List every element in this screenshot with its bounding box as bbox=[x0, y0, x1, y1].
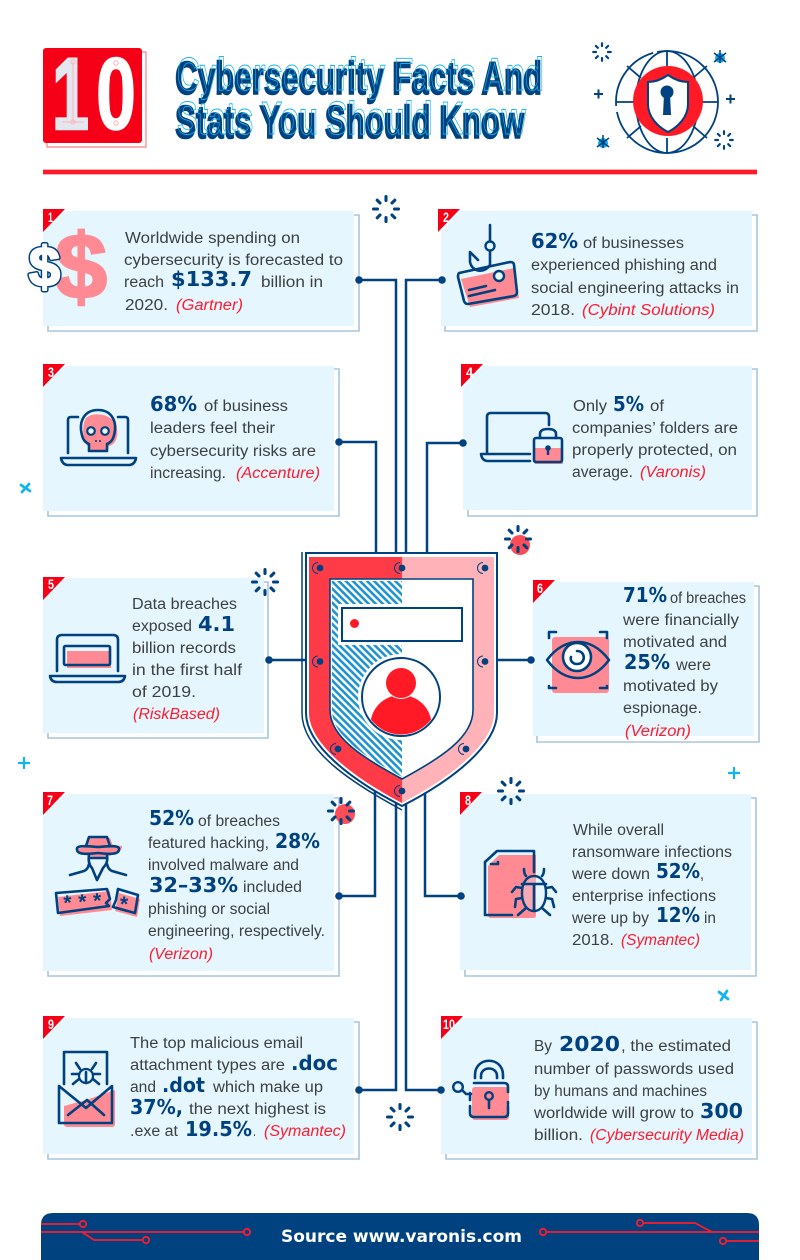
footer source bar bbox=[41, 1213, 759, 1260]
panel: fact 4: Only bbox=[573, 398, 607, 415]
panel: fact 10: (Cybersecurity Media) bbox=[590, 1127, 744, 1144]
icon: dollar signs: $ bbox=[55, 216, 107, 318]
panel: fact 7: 28% bbox=[275, 829, 320, 853]
panel: fact 7: phishing or social bbox=[148, 901, 270, 918]
panel: fact 1: 1 bbox=[48, 209, 53, 225]
icon: envelope with bug bbox=[59, 1052, 115, 1127]
panel: fact 4: of bbox=[650, 398, 665, 415]
panel: fact 1: cybersecurity is forecasted to bbox=[124, 252, 343, 269]
panel: fact 7: involved malware and bbox=[148, 857, 299, 874]
panel: fact 9: attachment types are bbox=[130, 1057, 285, 1074]
icon: hacker with broken password: * bbox=[120, 893, 129, 916]
panel: fact 4: 4 bbox=[466, 364, 473, 380]
header divider bbox=[43, 169, 757, 175]
panel: fact 10: billion. bbox=[534, 1127, 583, 1144]
panel: fact 4: (Varonis) bbox=[640, 464, 706, 481]
panel: fact 2 bbox=[438, 209, 757, 331]
footer source bar: Source www.varonis.com bbox=[281, 1227, 522, 1246]
title: Stats You Should Know bbox=[175, 96, 524, 148]
panel: fact 9: 37%, bbox=[130, 1095, 183, 1119]
panel: fact 10: number of passwords used bbox=[534, 1061, 734, 1078]
panel: fact 9: . bbox=[253, 1123, 256, 1140]
panel: fact 9 bbox=[43, 1016, 359, 1159]
panel: fact 9: which make up bbox=[212, 1079, 323, 1096]
panel: fact 6: motivated by bbox=[623, 678, 718, 695]
title: Cybersecurity Facts And bbox=[175, 52, 542, 104]
icon: laptop with padlock bbox=[481, 413, 563, 464]
circuit traces bbox=[41, 1220, 759, 1244]
panel: fact 7: of breaches bbox=[198, 813, 280, 830]
panel: fact 3: of business bbox=[204, 398, 288, 415]
panel: fact 5: (RiskBased) bbox=[133, 706, 220, 723]
panel: fact 10: by humans and machines bbox=[534, 1083, 707, 1100]
panel: fact 7: 52% bbox=[149, 806, 194, 830]
panel: fact 10 bbox=[441, 1016, 757, 1159]
panel: fact 5: 5 bbox=[48, 576, 54, 592]
panel: fact 1: reach bbox=[124, 274, 164, 291]
panel: fact 7: (Verizon) bbox=[149, 946, 213, 963]
icon: dollar signs bbox=[29, 216, 107, 318]
icon: hacker with broken password bbox=[56, 837, 140, 917]
panel: fact 10: 10 bbox=[443, 1016, 455, 1032]
title bbox=[175, 48, 544, 148]
panel: fact 3: (Accenture) bbox=[236, 465, 320, 482]
panel: fact 3: 68% bbox=[150, 392, 197, 416]
panel: fact 5: billion records bbox=[132, 640, 236, 657]
panel: fact 3 bbox=[43, 364, 339, 516]
panel: fact 7: 7 bbox=[47, 792, 53, 808]
icon: skull on laptop bbox=[61, 410, 136, 465]
header number badge: 0 bbox=[96, 37, 136, 151]
panel: fact 10: 2020 bbox=[559, 1032, 620, 1056]
panel: fact 6: motivated and bbox=[623, 634, 727, 651]
panel: fact 6: were financially bbox=[622, 612, 739, 629]
panel: fact 1: 2020. bbox=[125, 297, 168, 314]
panel: fact 2: social engineering attacks in bbox=[531, 280, 739, 297]
panel: fact 6: espionage. bbox=[623, 700, 702, 717]
panel: fact 4: properly protected, on bbox=[572, 442, 737, 459]
panel: fact 8: ransomware infections bbox=[572, 844, 732, 861]
panel: fact 7: engineering, respectively. bbox=[148, 923, 325, 940]
panel: fact 5 bbox=[43, 576, 268, 738]
panel: fact 2: of businesses bbox=[583, 235, 684, 252]
rivets bbox=[312, 562, 488, 796]
icon: dollar signs: $ bbox=[29, 235, 60, 298]
icon: globe with shield bbox=[616, 51, 718, 153]
panel: fact 6: 71% bbox=[623, 583, 667, 607]
panel: fact 2: 62% bbox=[531, 229, 578, 253]
name box bbox=[338, 604, 466, 645]
icon: phishing hook and card bbox=[458, 225, 519, 307]
title: Stats You Should Know bbox=[177, 92, 526, 144]
panel: fact 4: average. bbox=[572, 464, 633, 481]
header number badge: 1 bbox=[52, 37, 89, 151]
panel: fact 3: 3 bbox=[48, 364, 54, 380]
panel: fact 9: .doc bbox=[291, 1051, 338, 1075]
panel: fact 1: (Gartner) bbox=[176, 297, 243, 314]
panel: fact 5: Data breaches bbox=[132, 596, 237, 613]
panel: fact 2: experienced phishing and bbox=[531, 257, 717, 274]
panel: fact 9: The top malicious email bbox=[130, 1035, 303, 1052]
panel: fact 1: $133.7 bbox=[171, 267, 252, 291]
circuit connector lines bbox=[265, 276, 535, 1094]
panel: fact 6: 6 bbox=[537, 580, 543, 596]
panel: fact 4: 5% bbox=[613, 392, 644, 416]
panel: fact 6 bbox=[533, 580, 759, 742]
panel: fact 3: increasing. bbox=[150, 465, 226, 482]
panel: fact 7: included bbox=[243, 879, 302, 896]
panel: fact 1: Worldwide spending on bbox=[125, 230, 300, 247]
panel: fact 2: 2018. bbox=[531, 302, 575, 319]
panel: fact 9: (Symantec) bbox=[264, 1123, 346, 1140]
central shield bbox=[302, 552, 497, 810]
panel: fact 9: and bbox=[130, 1079, 156, 1096]
panel: fact 5: exposed bbox=[132, 618, 192, 635]
panel: fact 8: were down bbox=[571, 866, 650, 883]
panel: fact 5: 4.1 bbox=[198, 612, 235, 636]
panel: fact 8: 2018. bbox=[572, 932, 614, 949]
panel: fact 2: 2 bbox=[443, 209, 449, 225]
panel: fact 7: 32–33% bbox=[149, 873, 238, 897]
panel: fact 6: of breaches bbox=[670, 590, 746, 607]
panel: fact 7 bbox=[43, 792, 339, 976]
panel: fact 10: By bbox=[534, 1038, 552, 1055]
header number badge bbox=[43, 37, 146, 151]
decorative bursts and crosses bbox=[18, 196, 740, 1130]
panel: fact 1: billion in bbox=[261, 274, 323, 291]
panel: fact 8 bbox=[460, 792, 756, 976]
panel: fact 7: featured hacking, bbox=[148, 835, 269, 852]
panel: fact 9: 19.5% bbox=[185, 1117, 252, 1141]
icon: padlock with node bbox=[453, 1061, 509, 1120]
panel: fact 10: , the estimated bbox=[621, 1038, 731, 1055]
panel: fact 9: .exe at bbox=[130, 1123, 179, 1140]
panel: fact 8: in bbox=[704, 910, 716, 927]
panel: fact 5: in the first half bbox=[132, 662, 243, 679]
panel: fact 10: 300 bbox=[700, 1099, 743, 1123]
panel: fact 10: worldwide will grow to bbox=[533, 1105, 694, 1122]
avatar bbox=[358, 654, 444, 745]
panel: fact 9: .dot bbox=[162, 1073, 205, 1097]
panel: fact 9: the next highest is bbox=[189, 1101, 326, 1118]
panel: fact 4: companies’ folders are bbox=[572, 420, 738, 437]
panel: fact 6: (Verizon) bbox=[625, 723, 691, 740]
panel: fact 8: While overall bbox=[573, 822, 664, 839]
icon: eye bbox=[547, 632, 609, 693]
panel: fact 4 bbox=[461, 364, 757, 516]
icon: infected file with bug bbox=[485, 851, 556, 918]
decorative sparkles around globe bbox=[593, 43, 735, 149]
icon: laptop bbox=[50, 635, 125, 682]
title: Cybersecurity Facts And bbox=[177, 48, 544, 100]
panel: fact 1 bbox=[29, 209, 359, 331]
panel: fact 2: (Cybint Solutions) bbox=[582, 302, 715, 319]
panel: fact 8: enterprise infections bbox=[572, 888, 716, 905]
panel: fact 6: 25% bbox=[624, 650, 670, 674]
panel: fact 8: 52% bbox=[656, 859, 700, 883]
panel: fact 8: (Symantec) bbox=[621, 932, 700, 949]
hatched half bbox=[332, 581, 402, 777]
panel: fact 8: 12% bbox=[656, 903, 700, 927]
panel: fact 8: were up by bbox=[571, 910, 649, 927]
panel: fact 3: cybersecurity risks are bbox=[150, 443, 316, 460]
panel: fact 3: leaders feel their bbox=[150, 420, 275, 437]
panel: fact 5: of 2019. bbox=[132, 684, 196, 701]
icon: hacker with broken password: *** bbox=[63, 889, 103, 915]
panel: fact 8: , bbox=[700, 866, 704, 883]
icon: dollar signs: $ bbox=[29, 235, 60, 298]
panel: fact 8: 8 bbox=[465, 792, 471, 808]
panel: fact 9: 9 bbox=[48, 1016, 54, 1032]
panel: fact 6: were bbox=[675, 657, 711, 674]
